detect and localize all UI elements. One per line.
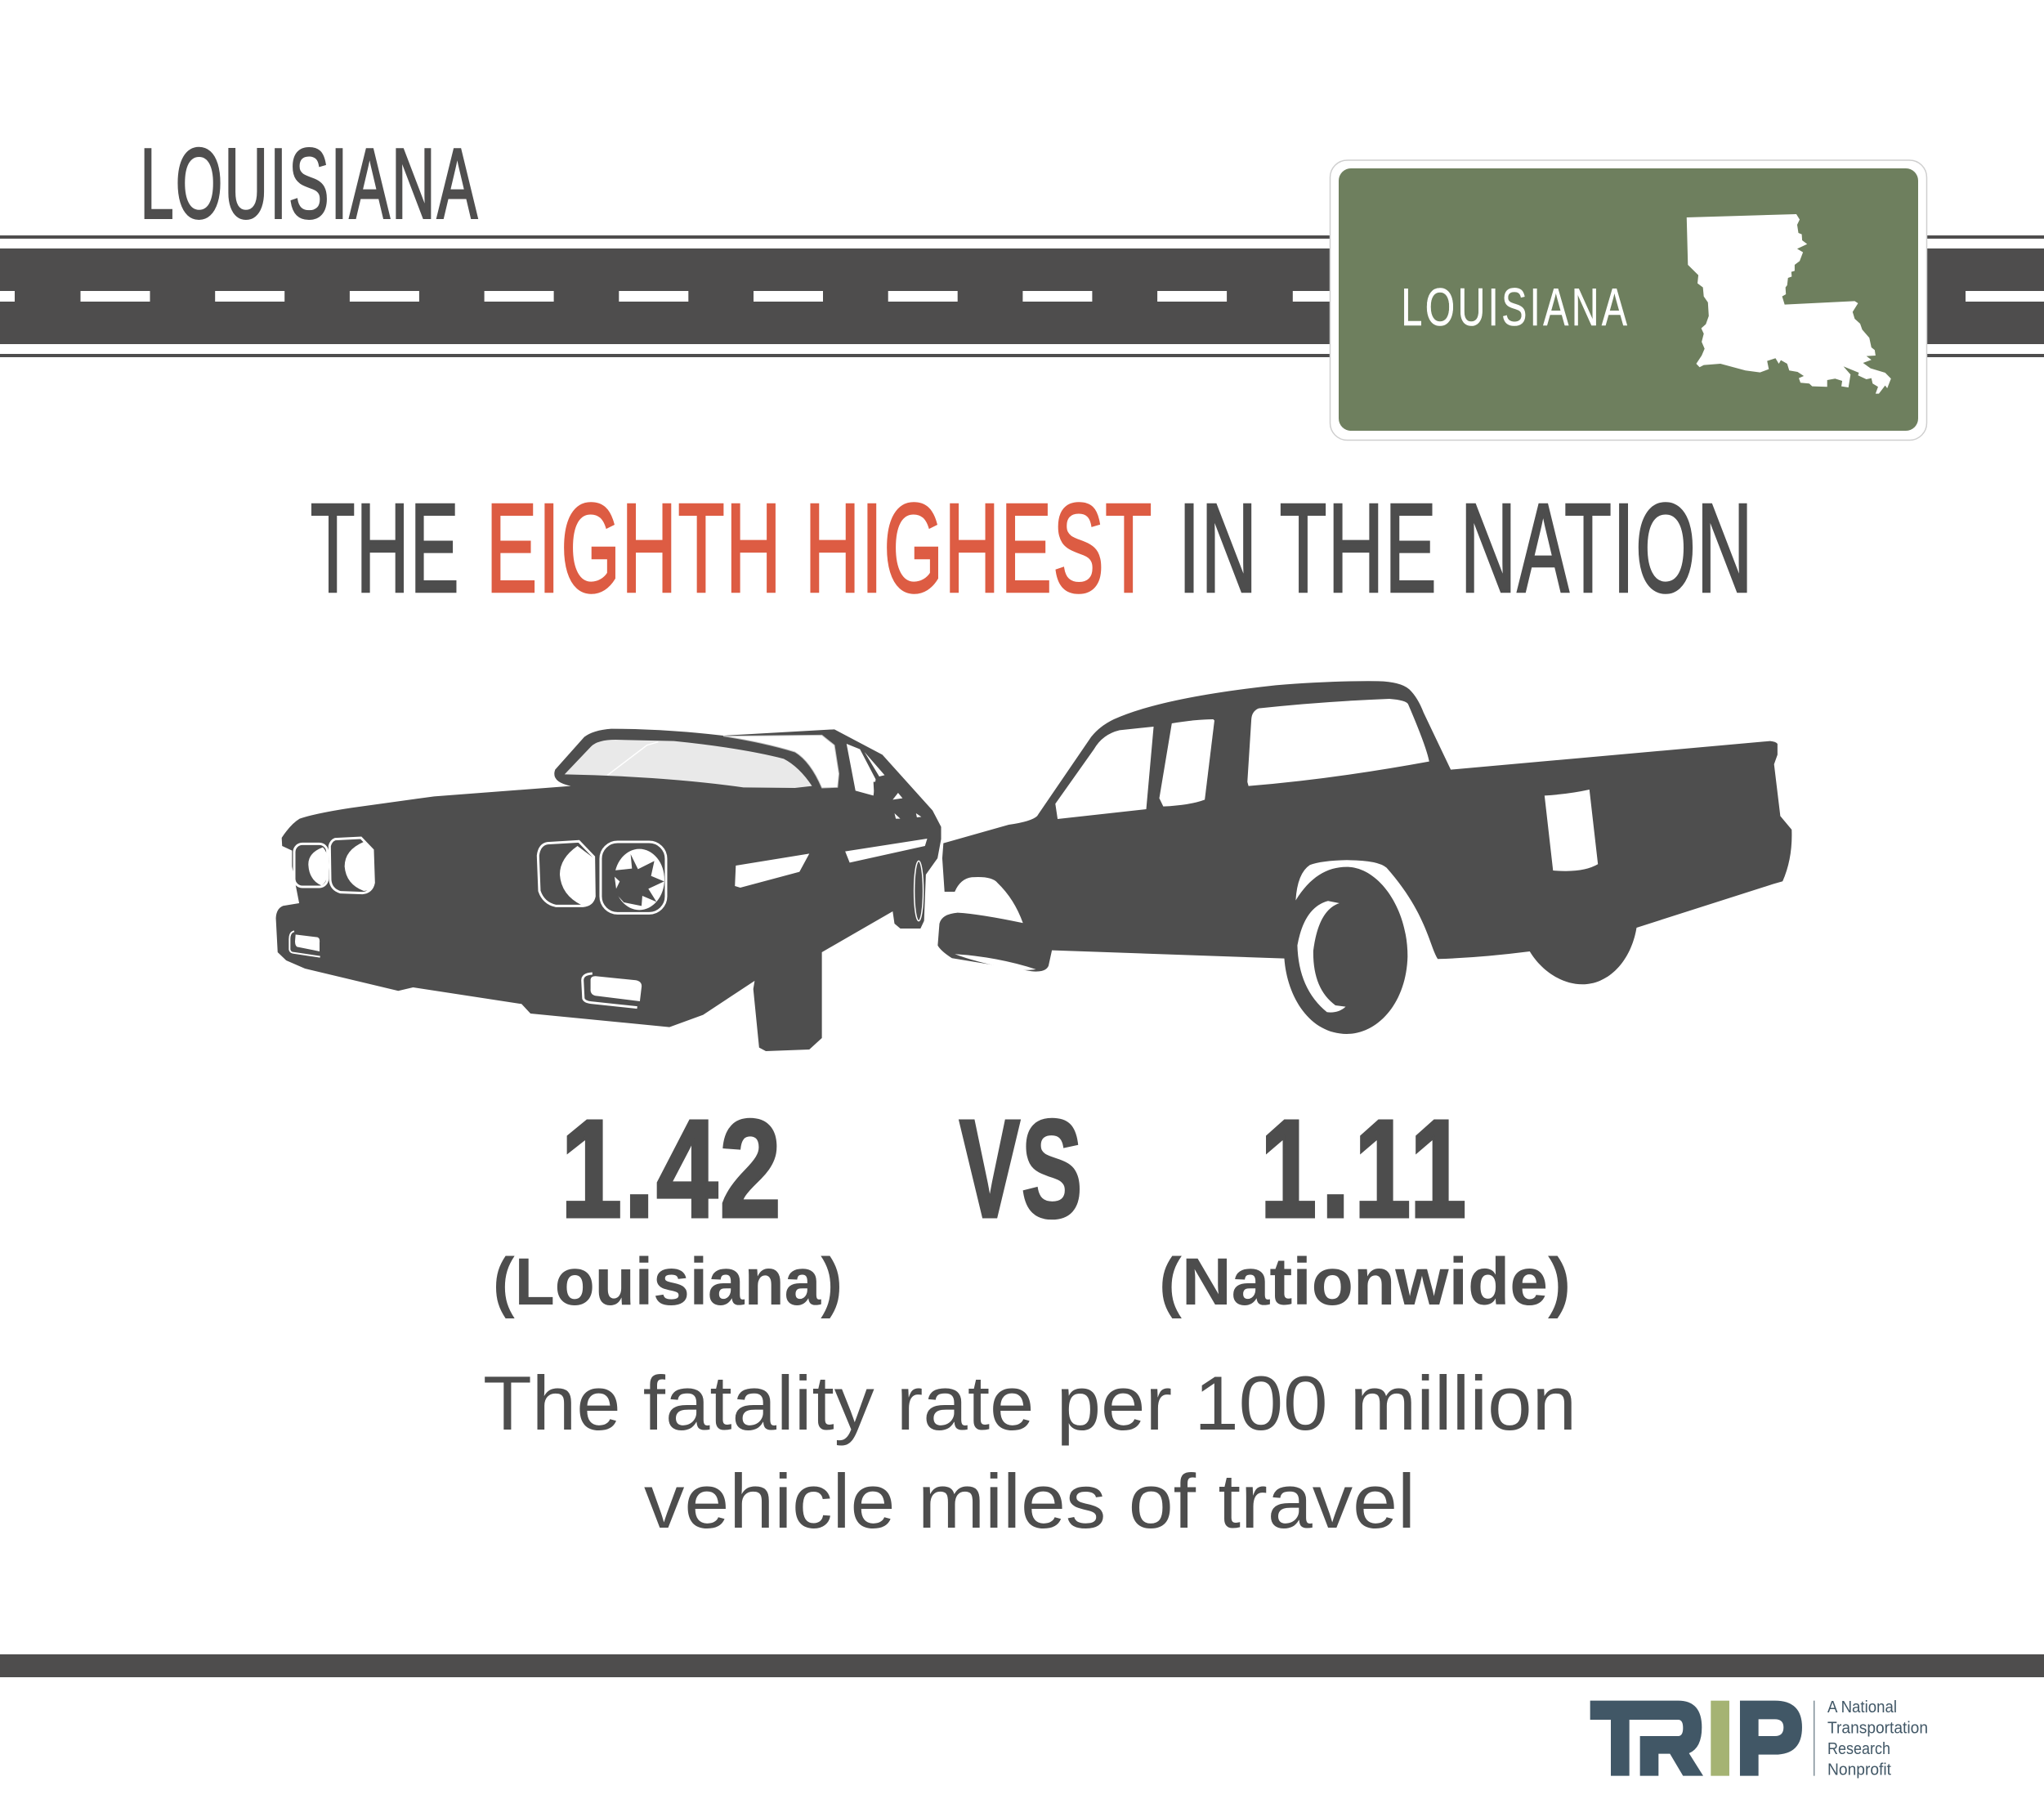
road with centre dashes <box>0 235 2044 357</box>
stat: Louisiana rate: 1.42 <box>561 1092 783 1247</box>
side windows <box>723 735 839 788</box>
bottom bar <box>0 1654 2044 1677</box>
logo tagline: Transportation <box>1827 1720 1928 1738</box>
description text: The fatality rate per 100 million <box>483 1360 1577 1446</box>
centre fog lamp <box>583 973 637 1008</box>
description text: vehicle miles of travel <box>644 1458 1416 1544</box>
logo tagline: Nonprofit <box>1827 1761 1891 1779</box>
car headlights <box>289 838 666 957</box>
logo tagline: A National <box>1827 1698 1897 1716</box>
icon: Louisiana state shape <box>1687 214 1891 394</box>
icon: car front view <box>276 729 941 1051</box>
headline: EIGHTH HIGHEST <box>486 477 1153 618</box>
windshield <box>565 740 812 788</box>
VS label: VS <box>959 1092 1084 1247</box>
TRIP logo <box>1590 1698 1928 1779</box>
label: Louisiana: (Louisiana) <box>493 1245 843 1319</box>
description text <box>483 1360 1577 1544</box>
logo tagline <box>1827 1698 1928 1779</box>
stat: Nationwide rate: 1.11 <box>1260 1092 1471 1247</box>
stat: Louisiana rate <box>493 1092 843 1319</box>
label: Nationwide: (Nationwide) <box>1159 1245 1571 1319</box>
logo tagline: Research <box>1827 1740 1890 1758</box>
highway sign <box>1331 160 1927 440</box>
side trim <box>735 839 928 888</box>
stat: Nationwide rate <box>1159 1092 1571 1319</box>
sign text: LOUISIANA <box>1401 277 1630 337</box>
title: LOUISIANA: LOUISIANA <box>141 128 479 239</box>
icon: pickup truck <box>937 681 1791 1034</box>
headline: THE <box>311 477 460 618</box>
